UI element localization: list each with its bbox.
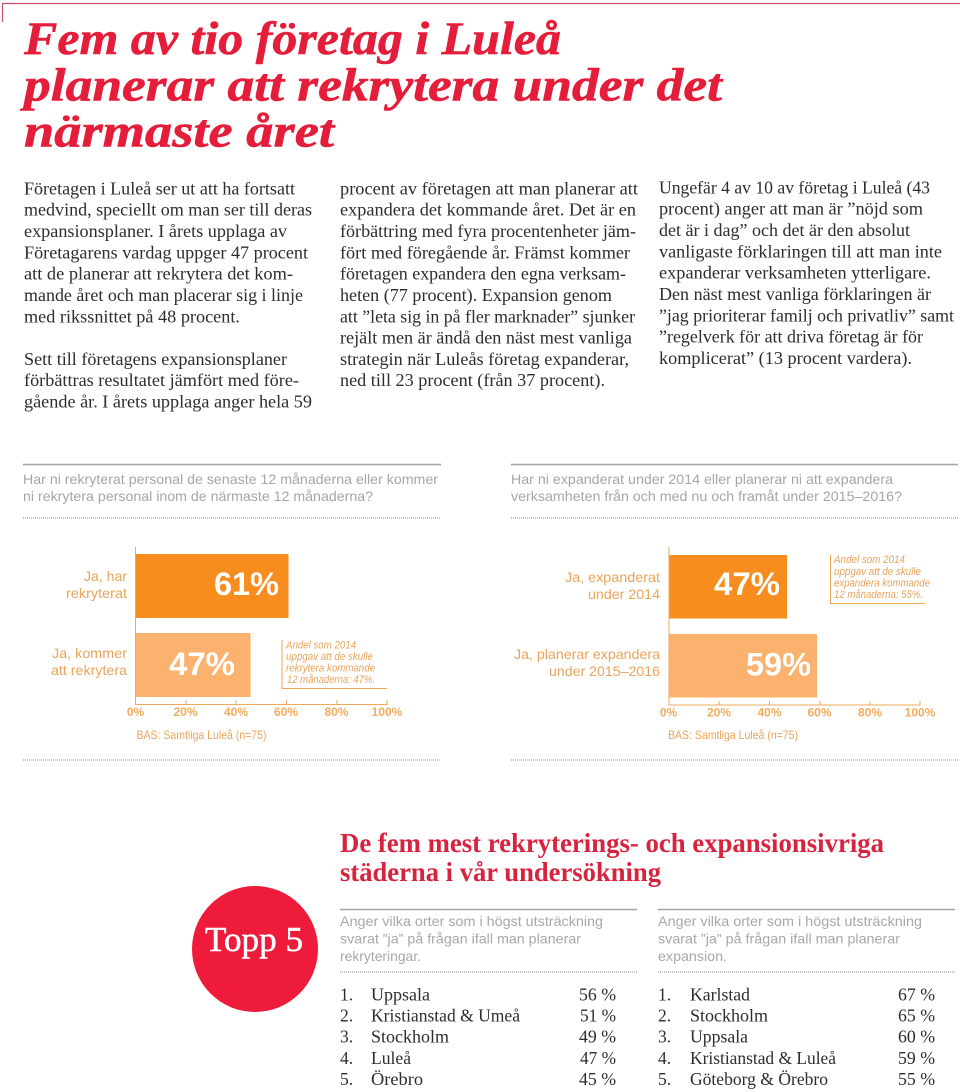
list: recruitment ranking: Luleå	[371, 1048, 411, 1068]
chart axis: 40%	[224, 705, 248, 719]
description: expansion: svarat ”ja” på frågan ifall man planerar	[658, 930, 900, 946]
text block: column 2: strategin när Luleås företag expanderar,	[340, 349, 629, 369]
description: expansion: Anger vilka orter som i högst utsträckning	[658, 913, 922, 929]
heading: top five cities: De fem mest rekryterings- och expansionsivriga	[340, 828, 884, 858]
list: expansion ranking: Karlstad	[690, 984, 750, 1004]
question: recruitment	[23, 471, 438, 504]
text block: column 1: expansionsplaner. I årets upplaga av	[24, 221, 287, 241]
text block: column 2: expandera det kommande året. Det är en	[340, 200, 636, 220]
chart axis	[660, 547, 936, 720]
list: expansion ranking: 65 %	[898, 1006, 935, 1026]
chart axis: 0%	[660, 706, 678, 720]
question: recruitment: ni rekrytera personal inom de närmaste 12 månaderna?	[23, 488, 373, 504]
bar: har rekryterat 61%: 61%	[214, 566, 279, 602]
icon: Topp 5 badge	[192, 886, 318, 1012]
text block: column 2: heten (77 procent). Expansion genom	[340, 285, 612, 305]
text block: column 2: rejält men är ändå den näst mest vanliga	[340, 328, 632, 348]
text block: column 1: medvind, speciellt om man ser till deras	[24, 200, 312, 220]
list: recruitment ranking: Uppsala	[371, 984, 430, 1004]
base note: BAS: Samtliga Luleå (n=75)	[668, 728, 798, 742]
chart axis: 0%	[127, 705, 145, 719]
callout: 2014 share recruiting: uppgav att de skulle	[286, 651, 373, 663]
list: expansion ranking: 1.	[658, 984, 671, 1004]
bar: expanderat 2014 47%: 47%	[714, 566, 780, 602]
list: expansion ranking	[658, 984, 935, 1089]
text block: column 3: Ungefär 4 av 10 av företag i Luleå (43	[659, 178, 930, 198]
bar: planerar expandera 59%	[514, 634, 817, 698]
callout: 2014 share expanding: 12 månaderna: 55%.	[834, 589, 923, 601]
list: expansion ranking: Göteborg & Örebro	[690, 1069, 828, 1089]
list: recruitment ranking: 4.	[340, 1048, 353, 1068]
list: recruitment ranking: 51 %	[580, 1006, 616, 1026]
title	[19, 13, 724, 158]
bar: har rekryterat 61%	[66, 554, 288, 618]
chart axis: 100%	[372, 705, 403, 719]
bar: har rekryterat 61%: Ja, har	[84, 568, 127, 584]
callout: 2014 share expanding: Andel som 2014	[833, 554, 905, 566]
list: recruitment ranking: 45 %	[579, 1069, 616, 1089]
list: expansion ranking: 3.	[658, 1026, 671, 1046]
list: recruitment ranking: 5.	[340, 1069, 353, 1089]
text block: column 1: förbättras resultatet jämfört med före-	[24, 370, 299, 390]
text block: column 1: Sett till företagens expansionsplaner	[24, 349, 287, 369]
list: recruitment ranking: 56 %	[579, 984, 616, 1004]
list: recruitment ranking: 49 %	[579, 1026, 616, 1046]
question: expansion: Har ni expanderat under 2014 eller planerar ni att expandera	[511, 471, 893, 487]
bar: kommer att rekrytera 47%: 47%	[169, 646, 235, 682]
list: recruitment ranking: 47 %	[580, 1048, 616, 1068]
chart axis: 60%	[807, 706, 832, 720]
list: recruitment ranking: 2.	[340, 1006, 353, 1026]
bar: expanderat 2014 47%: under 2014	[588, 586, 660, 602]
text block: column 3: ”jag prioriterar familj och privatliv” samt	[659, 305, 954, 325]
callout: 2014 share recruiting: 12 månaderna: 47%.	[287, 674, 375, 686]
text block: column 1: Företagen i Luleå ser ut att ha fortsatt	[24, 178, 295, 198]
callout: 2014 share recruiting	[282, 639, 387, 688]
chart axis: 60%	[274, 705, 298, 719]
text block: column 3: expanderar verksamheten ytterligare.	[659, 263, 931, 283]
callout: 2014 share expanding: expandera kommande	[834, 578, 930, 590]
text block: column 1: Företagarens vardag uppger 47 procent	[24, 242, 308, 262]
callout: 2014 share expanding: uppgav att de skulle	[834, 566, 921, 578]
title: närmaste året	[24, 106, 336, 158]
chart axis: 80%	[858, 706, 882, 720]
description: recruitment	[340, 913, 603, 964]
list: expansion ranking: Kristianstad & Luleå	[690, 1048, 836, 1068]
list: recruitment ranking: Örebro	[371, 1069, 423, 1089]
callout: 2014 share recruiting: rekrytera kommande	[286, 662, 375, 674]
panel: top 5 recruitment	[340, 910, 637, 1089]
bar: expanderat 2014 47%: Ja, expanderat	[565, 569, 660, 585]
text block: column 1: med rikssnittet på 48 procent.	[24, 306, 240, 326]
bar: kommer att rekrytera 47%: att rekrytera	[51, 662, 127, 678]
text block: column 2: ned till 23 procent (från 37 procent).	[340, 370, 605, 390]
list: recruitment ranking: 3.	[340, 1026, 353, 1046]
bar: kommer att rekrytera 47%	[51, 633, 250, 697]
question: recruitment: Har ni rekryterat personal de senaste 12 månaderna eller kommer	[23, 471, 438, 487]
text block: column 1: att de planerar att rekrytera det kom-	[24, 264, 293, 284]
text block: column 2: fört med föregående år. Främst kommer	[340, 242, 630, 262]
description: recruitment: Anger vilka orter som i högst utsträckning	[340, 913, 603, 929]
text block: column 1: mande året och man placerar sig i linje	[24, 285, 303, 305]
text block: column 3: det är i dag” och det är den absolut	[659, 220, 910, 240]
list: recruitment ranking	[340, 984, 616, 1089]
list: recruitment ranking: 1.	[340, 984, 353, 1004]
question: expansion	[511, 471, 902, 504]
base note: BAS: Samtliga Luleå (n=75)	[136, 728, 266, 742]
description: expansion	[658, 913, 922, 964]
panel: recruitment chart	[23, 464, 441, 760]
text block: column 2: att ”leta sig in på fler marknader” sjunker	[340, 306, 635, 326]
text block: column 1: gående år. I årets upplaga anger hela 59	[24, 392, 312, 412]
list: recruitment ranking: Stockholm	[371, 1026, 449, 1046]
callout: 2014 share expanding	[830, 554, 930, 604]
text block: column 2: procent av företagen att man planerar att	[340, 178, 638, 198]
bar: kommer att rekrytera 47%: Ja, kommer	[52, 645, 127, 661]
text block: column 3: ”regelverk för att driva företag är för	[659, 327, 923, 347]
list: expansion ranking: 2.	[658, 1006, 671, 1026]
description: recruitment: rekryteringar.	[340, 948, 421, 964]
bar: har rekryterat 61%: rekryterat	[66, 585, 127, 601]
chart axis: 100%	[905, 706, 936, 720]
text block: column 2: företagen expandera den egna verksam-	[340, 264, 626, 284]
list: expansion ranking: 59 %	[898, 1048, 935, 1068]
list: expansion ranking: 60 %	[898, 1026, 935, 1046]
text block: column 3: vanligaste förklaringen till att man inte	[659, 241, 942, 261]
panel: expansion chart	[511, 464, 958, 760]
text block: column 2	[340, 178, 638, 390]
title: planerar att rekrytera under det	[19, 60, 724, 112]
list: expansion ranking: Stockholm	[690, 1006, 768, 1026]
list: expansion ranking: 5.	[658, 1069, 671, 1089]
heading: top five cities: städerna i vår undersökning	[340, 857, 661, 887]
list: expansion ranking: 55 %	[898, 1069, 935, 1089]
panel: top 5 expansion	[658, 910, 955, 1089]
list: expansion ranking: 67 %	[898, 984, 935, 1004]
text block: column 2: förbättring med fyra procentenheter jäm-	[340, 221, 636, 241]
heading: top five cities	[340, 828, 884, 887]
chart axis: 20%	[173, 705, 198, 719]
description: recruitment: svarat ”ja” på frågan ifall man planerar	[340, 930, 581, 946]
text block: column 3: Den näst mest vanliga förklaringen är	[659, 284, 931, 304]
text block: column 1	[24, 178, 312, 412]
icon: Topp 5 badge: Topp 5	[205, 920, 303, 959]
list: expansion ranking: Uppsala	[690, 1026, 748, 1046]
bar: planerar expandera 59%: under 2015–2016	[549, 663, 660, 679]
list: recruitment ranking: Kristianstad & Umeå	[371, 1006, 520, 1026]
text block: column 3: komplicerat” (13 procent vardera).	[659, 348, 912, 368]
chart axis	[127, 547, 403, 719]
text block: column 3	[659, 178, 954, 368]
question: expansion: verksamheten från och med nu och framåt under 2015–2016?	[511, 488, 902, 504]
bar: planerar expandera 59%: 59%	[746, 646, 811, 682]
list: expansion ranking: 4.	[658, 1048, 671, 1068]
bar: planerar expandera 59%: Ja, planerar expandera	[514, 646, 660, 662]
chart axis: 20%	[707, 706, 731, 720]
bar: expanderat 2014 47%	[565, 555, 787, 618]
chart axis: 40%	[757, 706, 782, 720]
text block: column 3: procent) anger att man är ”nöjd som	[659, 199, 923, 219]
title: Fem av tio företag i Luleå	[23, 13, 561, 65]
description: expansion: expansion.	[658, 948, 727, 964]
chart axis: 80%	[324, 705, 349, 719]
callout: 2014 share recruiting: Andel som 2014	[285, 639, 356, 651]
